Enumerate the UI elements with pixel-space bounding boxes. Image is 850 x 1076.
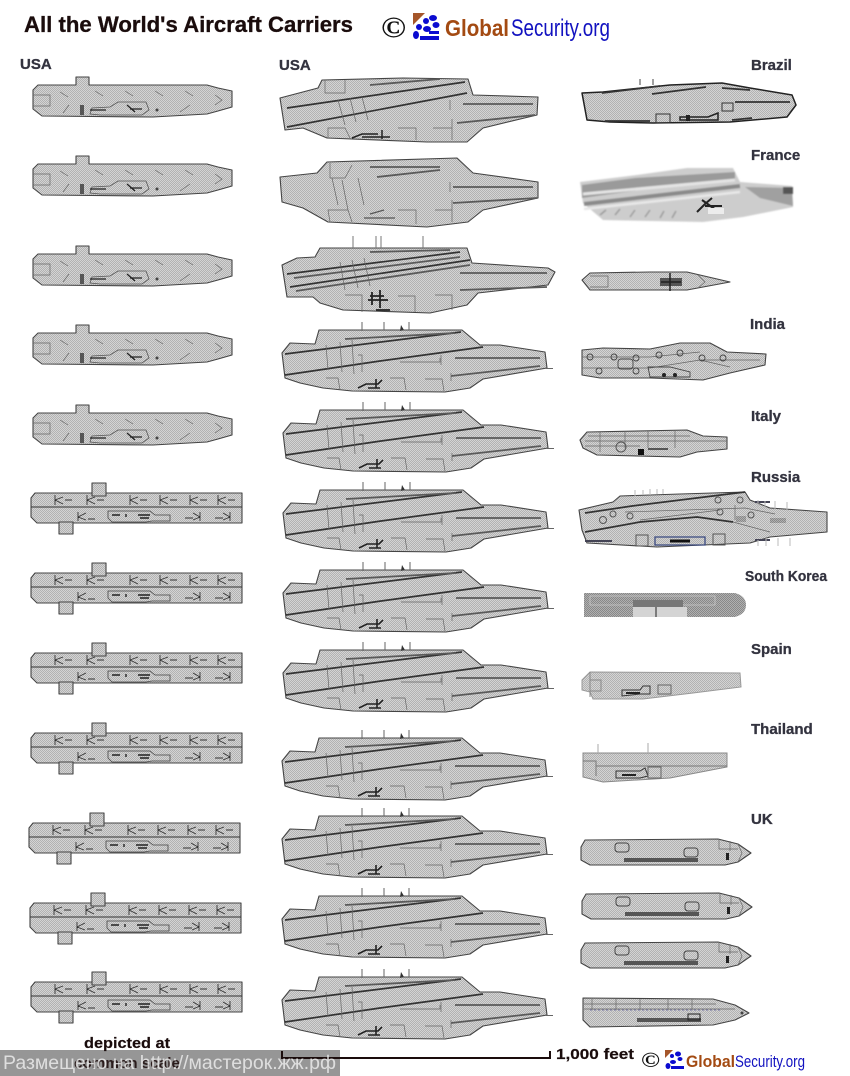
label: India: India bbox=[750, 316, 786, 333]
scale bar bbox=[282, 1046, 634, 1063]
carrier 6 bbox=[283, 482, 554, 552]
carrier 3 bbox=[282, 236, 555, 313]
caption: depicted at common scale bbox=[74, 1035, 180, 1072]
India carrier bbox=[582, 343, 766, 380]
watermark bar background bbox=[0, 1050, 340, 1076]
caption: depicted at common scale: depicted at bbox=[84, 1035, 170, 1052]
carrier row 8 bbox=[31, 643, 242, 694]
left column: USA amphibious flat-deck carriers bbox=[29, 483, 242, 1023]
carrier row 10 bbox=[29, 813, 240, 864]
label: Italy: Italy bbox=[751, 408, 782, 425]
carrier 2 bbox=[280, 158, 538, 227]
carrier row 4 bbox=[33, 325, 232, 365]
South Korea carrier bbox=[584, 593, 746, 617]
middle column: large USA carriers bbox=[280, 78, 555, 1039]
carrier 7 bbox=[283, 562, 554, 632]
logo: GlobalSecurity.org footer bbox=[641, 1048, 805, 1072]
carrier row 1 bbox=[33, 77, 232, 117]
UK carriers bbox=[581, 839, 752, 1027]
carrier row 7 bbox=[31, 563, 242, 614]
France carrier 2, nuclear bbox=[582, 272, 730, 291]
logo: GlobalSecurity.org footer: Global bbox=[686, 1053, 735, 1071]
carrier 4 bbox=[282, 322, 553, 392]
Brazil carrier bbox=[582, 79, 796, 123]
carrier row 12 bbox=[31, 972, 242, 1023]
UK carrier 2 bbox=[582, 893, 752, 919]
label: Russia: Russia bbox=[751, 469, 801, 486]
scale label: 1,000 feet bbox=[556, 1046, 634, 1063]
carrier 8 bbox=[283, 642, 554, 712]
France carrier, aerial photo bbox=[580, 168, 793, 222]
Spain carrier bbox=[582, 672, 741, 699]
logo: GlobalSecurity.org footer: © bbox=[641, 1048, 660, 1072]
logo: GlobalSecurity.org header bbox=[381, 11, 610, 44]
carrier 10 bbox=[282, 808, 553, 878]
Thailand carrier bbox=[583, 743, 727, 782]
carrier row 3 bbox=[33, 246, 232, 286]
UK carrier 3 bbox=[581, 942, 751, 968]
icon: small globe logo bbox=[665, 1050, 684, 1069]
carrier 11 bbox=[282, 888, 553, 958]
label: UK: UK bbox=[751, 811, 773, 828]
Russia carrier bbox=[579, 489, 827, 547]
carrier 12 bbox=[282, 969, 553, 1039]
left column: small USA carriers, island tab type bbox=[33, 77, 232, 445]
carrier 1 bbox=[280, 78, 538, 142]
Italy carrier bbox=[580, 430, 727, 457]
label: USA middle column: USA bbox=[279, 57, 311, 74]
icon: globe logo bbox=[413, 13, 440, 40]
label: Thailand: Thailand bbox=[751, 721, 813, 738]
carrier row 5 bbox=[33, 405, 232, 445]
label: USA left column: USA bbox=[20, 56, 52, 73]
caption: depicted at common scale: common scale bbox=[74, 1055, 180, 1072]
title: All the World's Aircraft Carriers bbox=[24, 12, 353, 37]
UK carrier 1 bbox=[581, 839, 751, 865]
UK carrier 4 bbox=[583, 998, 749, 1027]
logo: GlobalSecurity.org footer: Security.org bbox=[735, 1052, 805, 1071]
logo: GlobalSecurity.org header: © bbox=[381, 11, 406, 44]
label: Brazil: Brazil bbox=[751, 57, 792, 74]
label: Spain: Spain bbox=[751, 641, 792, 658]
label: South Korea: South Korea bbox=[745, 568, 828, 585]
carrier row 6 bbox=[31, 483, 242, 534]
label: France: France bbox=[751, 147, 800, 164]
watermark text: Размещено на http://мастерок.жж.рф bbox=[3, 1053, 336, 1074]
carrier row 2 bbox=[33, 156, 232, 196]
carrier row 11 bbox=[30, 893, 241, 944]
logo: GlobalSecurity.org header: Security.org bbox=[511, 15, 610, 42]
carrier row 9 bbox=[31, 723, 242, 774]
carrier 5 bbox=[283, 402, 554, 472]
logo: GlobalSecurity.org header: Global bbox=[445, 15, 509, 41]
carrier 9 bbox=[282, 730, 553, 800]
